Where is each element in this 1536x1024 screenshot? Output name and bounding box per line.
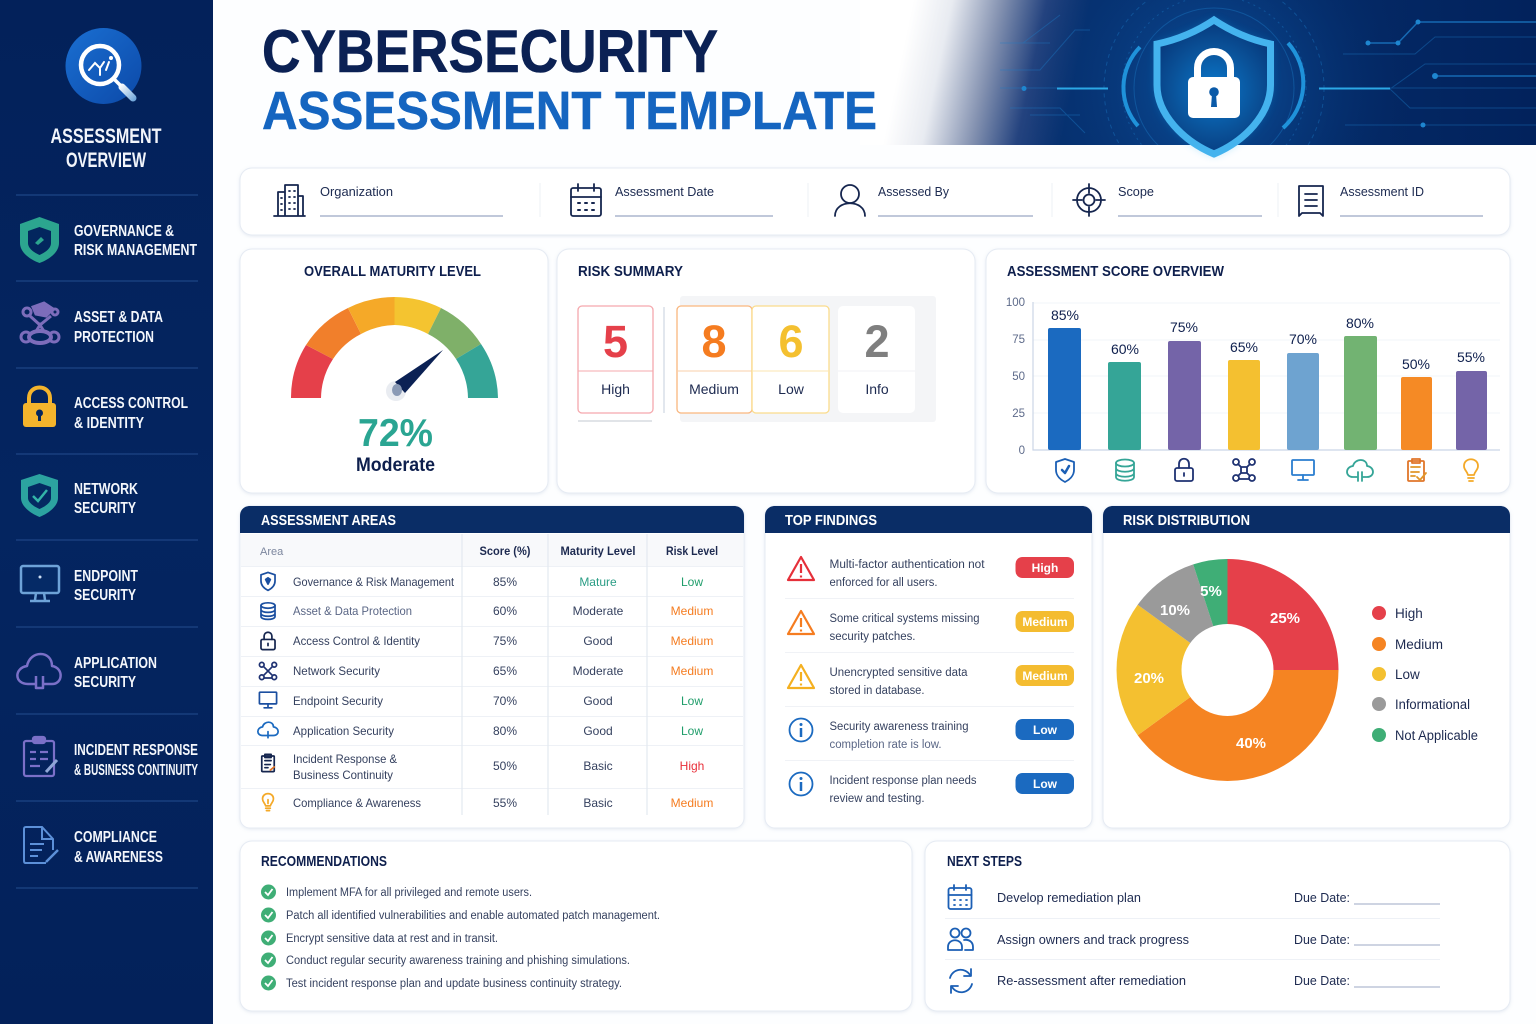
donut chart: 10% — [1160, 602, 1190, 619]
step: assign owners: Assign owners and track progress — [997, 932, 1189, 947]
label: governance: RISK MANAGEMENT — [74, 242, 197, 259]
icon: person — [835, 185, 865, 216]
field: scope: Scope — [1118, 185, 1154, 199]
field: assessment id: Assessment ID — [1340, 185, 1424, 199]
label: asset — [74, 309, 163, 346]
risk count: low: Low — [778, 381, 805, 397]
table row: endpoint: Good — [583, 694, 613, 708]
legend: Medium — [1395, 637, 1443, 652]
table row: asset: Asset & Data Protection — [293, 604, 412, 618]
table row: incident: 50% — [493, 759, 517, 773]
step: assign owners — [948, 928, 1440, 950]
label: compliance: & AWARENESS — [74, 849, 163, 866]
panel: next steps — [925, 841, 1510, 1011]
section header — [765, 506, 1092, 533]
recommendation: encryption — [261, 930, 498, 946]
bar chart: 100 — [1006, 297, 1025, 309]
bar chart: 75 — [1012, 334, 1025, 346]
label: access: ACCESS CONTROL — [74, 395, 188, 412]
step: remediation plan — [948, 885, 1440, 909]
recommendation: training: Conduct regular security awareness training and phishing simulations. — [286, 955, 630, 967]
legend — [1372, 606, 1478, 743]
header banner artwork — [900, 0, 1536, 145]
table row: network: Moderate — [573, 664, 624, 678]
risk count: medium — [677, 306, 752, 413]
sidebar title: ASSESSMENT — [50, 125, 162, 148]
step: assign owners: Due Date: — [1294, 932, 1350, 947]
recommendation: patching: Patch all identified vulnerabilities and enable automated patch management. — [286, 910, 660, 922]
panel: overall maturity level — [240, 249, 548, 493]
bar chart: 80% — [1346, 315, 1374, 331]
step: remediation plan: Develop remediation plan — [997, 890, 1141, 905]
table row: asset — [261, 603, 713, 619]
finding: training: Low — [1033, 723, 1058, 737]
heading: RECOMMENDATIONS — [261, 853, 387, 870]
label: network — [74, 481, 139, 517]
heading: RISK SUMMARY — [578, 263, 683, 280]
label: endpoint — [74, 568, 138, 604]
icon: cloud — [17, 654, 61, 688]
label: endpoint: SECURITY — [74, 587, 137, 604]
table row: network: Network Security — [293, 664, 380, 678]
table row: application: Low — [681, 724, 703, 738]
panel: assessment info bar — [240, 168, 1510, 235]
table row: application — [258, 722, 703, 738]
sidebar title — [50, 125, 162, 172]
table column headers: Score (%) — [480, 544, 530, 558]
panel: recommendations — [240, 841, 912, 1011]
risk count: medium: 8 — [701, 316, 727, 367]
finding: mfa: enforced for all users. — [830, 577, 938, 589]
bar chart: 55% — [1457, 349, 1485, 365]
heading: ASSESSMENT SCORE OVERVIEW — [1007, 263, 1225, 280]
finding: incident plan: Incident response plan needs — [830, 775, 977, 787]
table row: access: Access Control & Identity — [293, 634, 420, 648]
finding: incident plan: Low — [1033, 777, 1058, 791]
maturity label: Moderate — [356, 455, 435, 476]
label: application: SECURITY — [74, 674, 137, 691]
icon: governance shield — [20, 217, 59, 263]
title: CYBERSECURITY — [262, 18, 718, 85]
table row: network — [259, 662, 713, 680]
step: remediation plan: Due Date: — [1294, 890, 1350, 905]
table row: access — [261, 632, 713, 650]
table row: endpoint: Low — [681, 694, 703, 708]
risk count: medium: Medium — [689, 381, 739, 397]
table row: governance: 85% — [493, 575, 517, 589]
legend: Informational — [1395, 697, 1470, 712]
donut chart — [1117, 559, 1338, 781]
finding: encryption: Unencrypted sensitive data — [830, 667, 968, 679]
gauge chart — [291, 297, 498, 401]
bar chart: 75% — [1170, 319, 1198, 335]
donut chart: 5% — [1200, 583, 1222, 600]
section header: TOP FINDINGS — [785, 513, 877, 529]
bar chart — [1006, 297, 1500, 457]
table row: incident: High — [680, 759, 704, 773]
panel: top findings — [765, 506, 1092, 828]
table row: application: Good — [583, 724, 613, 738]
panel: assessment areas — [240, 506, 744, 828]
label: access — [74, 395, 188, 432]
icon: bulb axis — [1464, 459, 1478, 481]
label: governance: GOVERNANCE & — [74, 223, 174, 240]
sidebar title: OVERVIEW — [66, 149, 146, 172]
label: asset: ASSET & DATA — [74, 309, 163, 326]
table row: incident: Incident Response & — [293, 752, 397, 766]
section header — [1103, 506, 1510, 533]
table row: incident: Business Continuity — [293, 768, 393, 782]
icon: document — [24, 827, 58, 863]
table row: endpoint: 70% — [493, 694, 517, 708]
table row: incident — [262, 752, 704, 782]
label: network: NETWORK — [74, 481, 139, 498]
section header: ASSESSMENT AREAS — [261, 513, 396, 529]
table row: governance: Low — [681, 575, 703, 589]
heading: NEXT STEPS — [947, 853, 1022, 870]
table row: compliance: Basic — [583, 796, 613, 810]
icon: shield axis — [1056, 459, 1074, 482]
score value: 72% — [358, 412, 433, 455]
label: incident: & BUSINESS CONTINUITY — [74, 762, 198, 779]
finding: training: completion rate is low. — [830, 739, 942, 751]
finding: mfa: High — [1032, 561, 1058, 575]
risk count: info — [838, 306, 915, 413]
table row: endpoint — [259, 692, 703, 708]
icon: network shield — [21, 474, 58, 517]
icon: clipboard — [24, 737, 57, 776]
bar chart: 50 — [1012, 371, 1025, 383]
heading: OVERALL MATURITY LEVEL — [304, 263, 481, 280]
icon: lock axis — [1175, 459, 1193, 481]
icon: clipboard axis — [1408, 459, 1426, 481]
bar chart: 60% — [1111, 341, 1139, 357]
label: governance — [74, 223, 197, 259]
label: asset: PROTECTION — [74, 329, 154, 346]
bar chart: 0 — [1019, 445, 1025, 457]
legend: High — [1395, 606, 1423, 621]
recommendation: mfa: Implement MFA for all privileged and remote users. — [286, 887, 532, 899]
table column headers — [260, 544, 718, 558]
risk count: low: 6 — [778, 316, 804, 367]
finding: patches: security patches. — [830, 631, 916, 643]
finding: incident plan: review and testing. — [830, 793, 924, 805]
legend: Low — [1395, 667, 1420, 682]
icon: id document — [1299, 186, 1323, 216]
risk count: high — [578, 306, 653, 413]
table row: application: Application Security — [293, 724, 394, 738]
title: ASSESSMENT TEMPLATE — [262, 81, 877, 141]
table row: asset: 60% — [493, 604, 517, 618]
label: application — [74, 655, 157, 691]
bar chart: 50% — [1402, 356, 1430, 372]
finding: mfa — [788, 557, 1074, 589]
risk count: info: Info — [865, 381, 889, 397]
donut chart: 25% — [1270, 610, 1300, 627]
icon: monitor — [21, 566, 59, 601]
finding: patches: Medium — [1022, 615, 1068, 629]
section header: RISK DISTRIBUTION — [1123, 513, 1250, 529]
risk count: high: 5 — [603, 316, 628, 367]
label: application: APPLICATION — [74, 655, 157, 672]
icon: monitor axis — [1292, 460, 1314, 480]
risk count: high: High — [601, 381, 630, 397]
field: assessed by: Assessed By — [878, 185, 950, 199]
step: re-assessment: Due Date: — [1294, 973, 1350, 988]
recommendation: encryption: Encrypt sensitive data at rest and in transit. — [286, 933, 498, 945]
section header — [240, 506, 744, 533]
risk count: info: 2 — [864, 316, 890, 367]
table row: compliance: 55% — [493, 796, 517, 810]
table row: compliance — [263, 794, 713, 811]
step: re-assessment — [950, 969, 1440, 993]
bar chart: 25 — [1012, 408, 1025, 420]
table row: network: 65% — [493, 664, 517, 678]
panel: risk distribution — [1103, 506, 1510, 828]
table row: asset: Moderate — [573, 604, 624, 618]
recommendation: mfa — [261, 884, 532, 900]
icon: calendar — [571, 184, 601, 216]
bar chart: 70% — [1289, 331, 1317, 347]
table row: access: 75% — [493, 634, 517, 648]
panel: assessment score overview — [986, 249, 1510, 493]
table row: access: Medium — [671, 634, 713, 648]
label: compliance — [74, 829, 163, 866]
table column headers: Area — [260, 546, 284, 558]
label: compliance: COMPLIANCE — [74, 829, 157, 846]
legend: Not Applicable — [1395, 728, 1478, 743]
bar chart: 85% — [1051, 307, 1079, 323]
panel: risk summary — [557, 249, 975, 493]
icon: database axis — [1116, 460, 1134, 481]
title — [262, 18, 877, 141]
finding: mfa: Multi-factor authentication not — [830, 559, 985, 571]
table row: network: Medium — [671, 664, 713, 678]
table row: governance: Mature — [579, 575, 617, 589]
label: network: SECURITY — [74, 500, 137, 517]
field: assessment date: Assessment Date — [615, 185, 714, 199]
table row: access: Good — [583, 634, 613, 648]
table row: compliance: Medium — [671, 796, 713, 810]
finding: incident plan — [790, 772, 1074, 805]
icon: cloud axis — [1347, 460, 1373, 481]
table column headers: Risk Level — [666, 544, 718, 558]
panel: sidebar — [0, 0, 213, 1024]
icon: magnifier logo — [66, 28, 142, 104]
step: re-assessment: Re-assessment after remediation — [997, 973, 1186, 988]
icon: building — [274, 185, 305, 216]
label: access: & IDENTITY — [74, 415, 145, 432]
icon: target — [1073, 184, 1105, 216]
finding: patches — [788, 611, 1074, 643]
finding: training — [790, 718, 1074, 751]
table column headers: Maturity Level — [560, 544, 636, 558]
donut chart: 20% — [1134, 670, 1164, 687]
table row: incident: Basic — [583, 759, 613, 773]
finding: encryption: Medium — [1022, 669, 1068, 683]
label: endpoint: ENDPOINT — [74, 568, 138, 585]
donut chart: 40% — [1236, 735, 1266, 752]
finding: encryption — [788, 665, 1074, 697]
icon: network axis — [1233, 459, 1255, 481]
bar chart: 65% — [1230, 339, 1258, 355]
icon: yellow padlock — [23, 388, 56, 427]
risk count: low — [752, 306, 829, 413]
label: incident — [74, 742, 198, 779]
icon: shield with padlock — [1157, 20, 1270, 154]
table row: compliance: Compliance & Awareness — [293, 796, 421, 810]
label: incident: INCIDENT RESPONSE — [74, 742, 198, 759]
icon: asset network — [21, 303, 59, 343]
table row: application: 80% — [493, 724, 517, 738]
table row: asset: Medium — [671, 604, 713, 618]
finding: encryption: stored in database. — [830, 685, 924, 697]
table row: endpoint: Endpoint Security — [293, 694, 383, 708]
table row: governance: Governance & Risk Management — [293, 575, 455, 589]
table row: governance — [261, 572, 703, 590]
finding: patches: Some critical systems missing — [830, 613, 980, 625]
field: organization: Organization — [320, 185, 393, 199]
finding: training: Security awareness training — [830, 721, 968, 733]
recommendation: testing: Test incident response plan and update business continuity strategy. — [286, 978, 622, 990]
